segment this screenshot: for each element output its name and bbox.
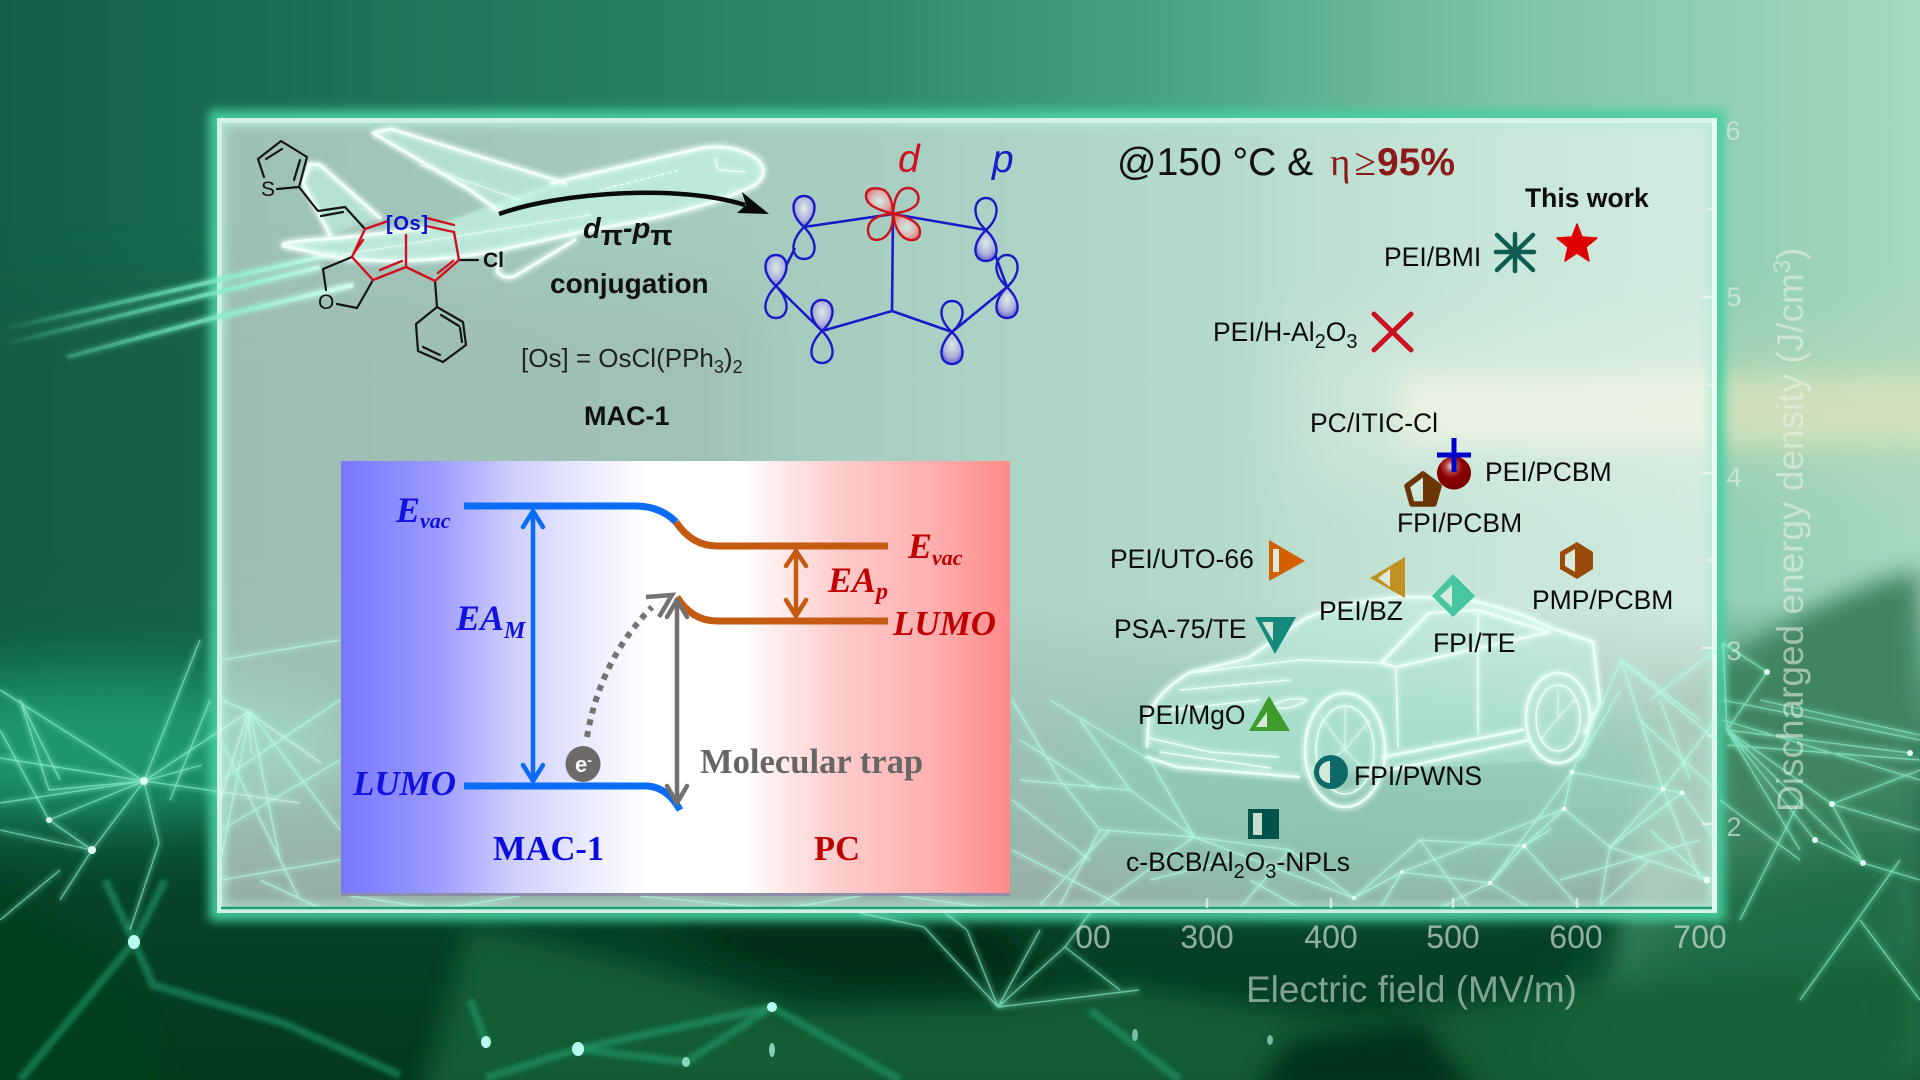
- network lines inside panel: [221, 640, 1716, 909]
- chart heading: 95%: [1377, 141, 1455, 184]
- arrow: molecular trap depth: [667, 600, 687, 803]
- text: d-p conjugation: π: [601, 220, 623, 252]
- MAC-1 LUMO level: [464, 786, 680, 810]
- data point: PEI/BZ: [1319, 557, 1405, 626]
- orbital diagram: [765, 188, 1018, 364]
- background: network lines outside panel: [0, 640, 1920, 1007]
- data point: This work: [1525, 183, 1649, 261]
- data point: PEI/H-Al2O3: O: [1326, 317, 1346, 347]
- illustration: glowing plane: [283, 129, 763, 277]
- data point: PSA-75/TE: [1114, 614, 1296, 654]
- data point: FPI/PCBM: [1397, 474, 1522, 538]
- text: d-p conjugation: d: [583, 213, 601, 245]
- x axis tick labels: 600: [1549, 919, 1603, 955]
- label: PC: PC: [814, 830, 860, 868]
- data point: c-BCB/Al2O3-NPLs: -NPLs: [1276, 847, 1350, 877]
- text: Os definition: [Os] = OsCl(PPh: [521, 343, 714, 373]
- x axis title: Electric field (MV/m): [1246, 969, 1577, 1010]
- data point: c-BCB/Al2O3-NPLs: [1126, 809, 1350, 883]
- label: E vac red: vac: [932, 545, 963, 570]
- panel glow: [217, 118, 1717, 913]
- x axis tick labels: 700: [1673, 919, 1727, 955]
- data point: PMP/PCBM: PMP/PCBM: [1532, 585, 1673, 615]
- arrow: electron hop dotted: [587, 595, 672, 737]
- data point: FPI/TE: [1432, 574, 1515, 658]
- y axis tick labels: 3: [1726, 636, 1742, 666]
- y axis tick labels: 6: [1725, 116, 1741, 146]
- orbital labels: [898, 138, 1014, 181]
- panel: mint glow near car: [1050, 680, 1690, 900]
- molecule atom labels: [Os]: [386, 213, 428, 235]
- x axis tick labels: 400: [1304, 919, 1358, 955]
- data point: PEI/MgO: [1138, 696, 1290, 731]
- molecule atom labels: O: [318, 291, 334, 314]
- electron: [566, 746, 600, 782]
- label: EA p: p: [874, 579, 888, 605]
- x axis tick labels: 00: [1075, 919, 1111, 955]
- chart frame: axis line and ticks: [221, 209, 1712, 908]
- arrow: EA_p: [786, 551, 806, 616]
- data point: PEI/H-Al2O3: 2: [1315, 331, 1326, 353]
- text: Os definition: 2: [733, 357, 743, 377]
- x axis tick labels: 500: [1426, 919, 1480, 955]
- data point: PEI/H-Al2O3: 3: [1346, 331, 1357, 353]
- label: LUMO red: LUMO: [892, 604, 996, 643]
- y axis title: ): [1770, 248, 1811, 260]
- arrow: curved to orbitals: [499, 192, 769, 214]
- label: E vac red: E: [908, 526, 932, 566]
- data point: PSA-75/TE: PSA-75/TE: [1114, 614, 1247, 644]
- label: EA p: EA: [828, 560, 876, 600]
- text: d-p conjugation: π: [650, 220, 672, 252]
- network nodes inside panel: [1352, 770, 1710, 900]
- streaks: plane trails: [0, 253, 353, 357]
- data point: This work: This work: [1525, 183, 1649, 213]
- panel: translucent card: [217, 118, 1717, 913]
- label: E vac blue: vac: [420, 508, 451, 533]
- label: E vac blue: E: [396, 490, 420, 530]
- data point: PEI/PCBM: [1437, 456, 1612, 490]
- orbital labels: p: [991, 138, 1014, 181]
- label: EA M: EA: [456, 598, 504, 638]
- y axis tick labels: 4: [1726, 462, 1742, 492]
- illustration: glowing car: [1147, 597, 1600, 807]
- label: Molecular trap: Molecular trap: [700, 743, 923, 781]
- chart heading: η≥: [1330, 141, 1376, 184]
- MAC-1 vacuum level: [464, 506, 676, 522]
- data point: c-BCB/Al2O3-NPLs: 3: [1265, 861, 1276, 883]
- label: EA M: M: [503, 618, 527, 644]
- data point: PEI/H-Al2O3: PEI/H-Al: [1213, 317, 1315, 347]
- electron: e: [575, 752, 587, 777]
- y axis title: Discharged energy density (J/cm: [1770, 273, 1811, 812]
- y axis tick labels: 5: [1726, 282, 1742, 312]
- background: network glow nodes: [128, 935, 1273, 1067]
- chart heading: @150 °C &: [1117, 141, 1313, 184]
- data point: FPI/PCBM: FPI/PCBM: [1397, 508, 1522, 538]
- text: conjugation: conjugation: [550, 268, 709, 299]
- data point: FPI/PWNS: [1314, 755, 1482, 791]
- arrow: EA_M: [523, 511, 543, 781]
- text: Os definition: ): [724, 343, 733, 373]
- PC LUMO level: [677, 597, 888, 621]
- data point: PEI/BMI: [1384, 234, 1534, 272]
- y axis tick labels: 2: [1726, 812, 1742, 842]
- orbital labels: d: [898, 138, 921, 181]
- molecule: MAC-1 structure: [258, 141, 478, 362]
- x axis tick labels: [1075, 919, 1727, 955]
- molecule atom labels: Cl: [483, 249, 504, 272]
- panel: energy level diagram: [341, 461, 1010, 896]
- label: MAC-1: MAC-1: [493, 830, 604, 868]
- molecule atom labels: [261, 178, 504, 314]
- molecule atom labels: S: [261, 178, 275, 201]
- data point: c-BCB/Al2O3-NPLs: O: [1245, 847, 1265, 877]
- data point: FPI/PWNS: FPI/PWNS: [1354, 761, 1482, 791]
- label: LUMO blue: LUMO: [352, 764, 456, 803]
- data point: PC/ITIC-Cl: PC/ITIC-Cl: [1310, 408, 1438, 438]
- text: Os definition: 3: [714, 357, 724, 377]
- electron: -: [587, 752, 592, 768]
- data point: PEI/BZ: PEI/BZ: [1319, 596, 1403, 626]
- text: MAC-1: MAC-1: [584, 401, 670, 431]
- data point: c-BCB/Al2O3-NPLs: 2: [1234, 861, 1245, 883]
- data point: PEI/H-Al2O3: [1213, 314, 1411, 353]
- data point: PEI/UTO-66: PEI/UTO-66: [1110, 544, 1254, 574]
- data point: PC/ITIC-Cl: [1310, 408, 1471, 472]
- data point: PMP/PCBM: [1532, 542, 1673, 615]
- background: blurred foreground network: [20, 880, 1180, 1080]
- data point: PEI/MgO: PEI/MgO: [1138, 700, 1246, 730]
- text: d-p conjugation: -p: [623, 213, 650, 245]
- x axis tick labels: 300: [1180, 919, 1234, 955]
- data point: PEI/PCBM: PEI/PCBM: [1485, 457, 1612, 487]
- background: network right nodes: [46, 669, 1913, 866]
- y axis title: 3: [1769, 260, 1796, 273]
- data point: c-BCB/Al2O3-NPLs: c-BCB/Al: [1126, 847, 1234, 877]
- data point: PEI/UTO-66: [1110, 540, 1305, 581]
- data point: PEI/BMI: PEI/BMI: [1384, 242, 1481, 272]
- PC vacuum level: [676, 522, 888, 546]
- data point: FPI/TE: FPI/TE: [1433, 628, 1515, 658]
- y axis tick labels: [1725, 116, 1742, 842]
